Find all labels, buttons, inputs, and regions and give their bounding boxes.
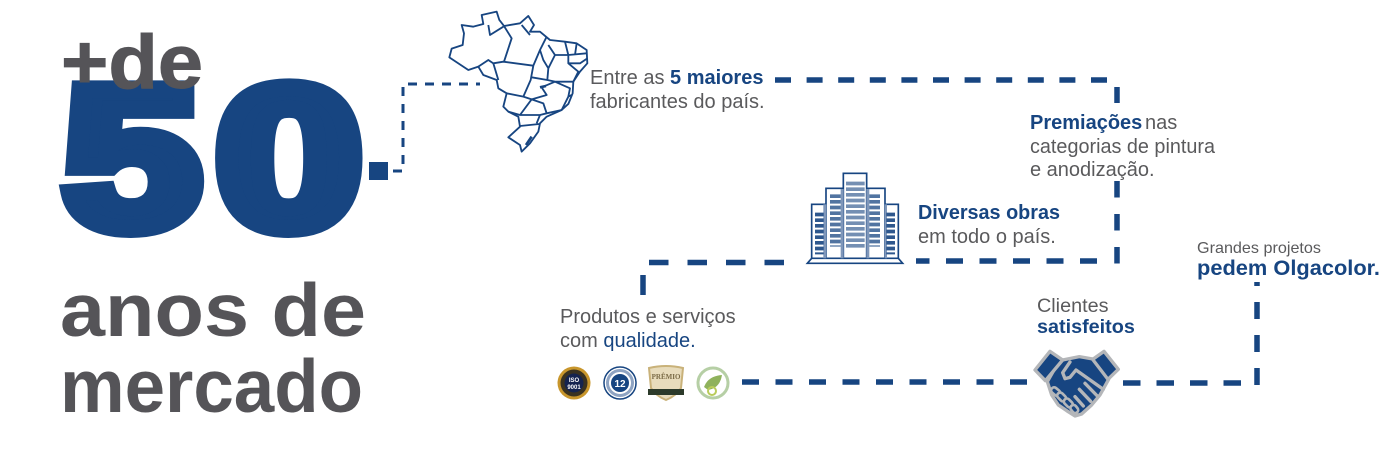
text: premiações: categorias de pintura (1030, 136, 1216, 158)
text: clientes satisfeitos (1037, 295, 1135, 338)
text: grandes projetos: Grandes projetos (1197, 240, 1321, 257)
text: premiações: e anodização. (1030, 159, 1155, 181)
text: +de: +de (61, 20, 203, 105)
icon: handshake (1035, 351, 1118, 416)
text: clientes satisfeitos: satisfeitos (1037, 316, 1135, 338)
square period (369, 162, 388, 180)
thin dashed connector from 50 to map (393, 84, 480, 171)
text: premiações: nas (1145, 112, 1177, 134)
text: premiações (1030, 112, 1216, 181)
text: grandes projetos (1197, 240, 1380, 280)
headline: +de 50 anos de mercado (60, 20, 388, 428)
badge: 12 anos garantia: 12 (614, 379, 626, 390)
badge: ISO 9001: ISO (569, 378, 579, 384)
big number 50 (64, 47, 362, 270)
text: fabricantes: fabricantes do país. (590, 91, 765, 113)
icon: buildings (807, 173, 903, 263)
badge: prêmio: PRÊMIO (652, 373, 681, 381)
icon: map of Brazil (449, 12, 587, 152)
text: mercado: mercado (60, 344, 363, 428)
badge: 12 anos garantia (604, 367, 636, 399)
big number 50: 5 (64, 47, 200, 270)
badge: prêmio (648, 366, 684, 400)
text: diversas obras: em todo o país. (918, 226, 1056, 248)
quality badges (558, 366, 728, 400)
text: produtos e serviços: com qualidade. (560, 330, 696, 352)
text: diversas obras (918, 202, 1060, 248)
text: produtos e serviços: Produtos e serviços (560, 306, 736, 328)
text: diversas obras: Diversas obras (918, 202, 1060, 224)
text: clientes satisfeitos: Clientes (1037, 295, 1109, 317)
badge: ISO 9001: 9001 (567, 385, 581, 391)
text: anos de: anos de (60, 268, 366, 352)
text: grandes projetos: pedem Olgacolor. (1197, 257, 1380, 280)
thick dashed connectors (643, 80, 1257, 385)
text: 5 maiores: Entre as 5 maiores (590, 67, 763, 89)
text: premiações: Premiações (1030, 112, 1142, 134)
big number 50: 0 (216, 47, 362, 270)
text: produtos e serviços (560, 306, 736, 352)
badge: ISO 9001 (558, 366, 590, 400)
badge: green seal (698, 368, 728, 398)
